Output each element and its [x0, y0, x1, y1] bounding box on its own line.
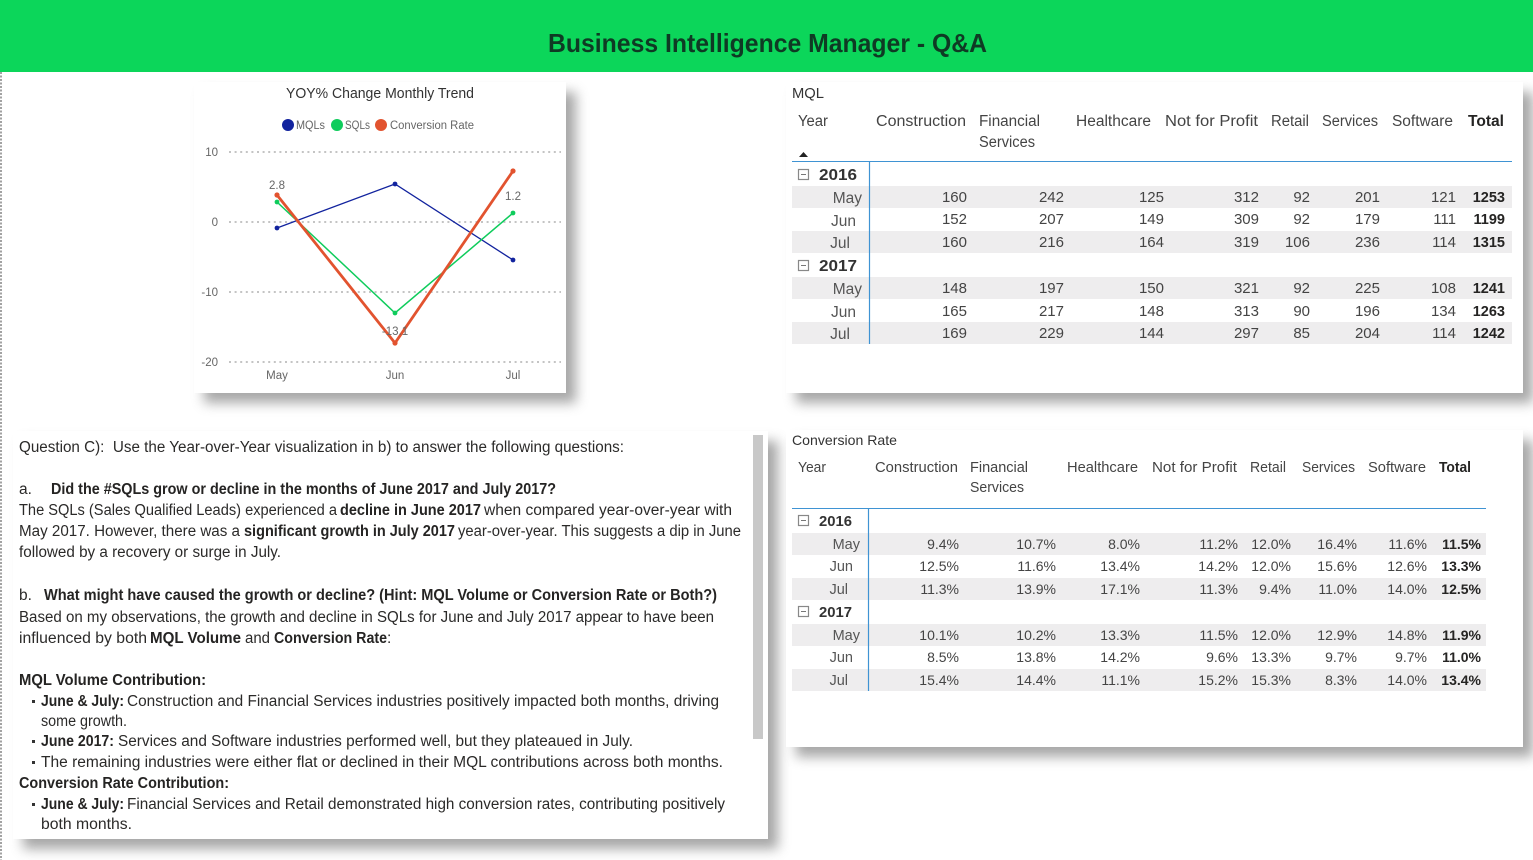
table values: 15.6%	[1317, 558, 1357, 574]
year groups	[798, 167, 857, 275]
part a: significant growth in July 2017	[244, 523, 455, 540]
table values: 15.2%	[1198, 672, 1238, 688]
table values: 12.0%	[1251, 627, 1291, 643]
month labels: May	[833, 190, 862, 207]
table values: 8.0%	[1108, 536, 1140, 552]
table values: 14.2%	[1198, 558, 1238, 574]
table header: Services	[970, 480, 1024, 496]
table values	[942, 189, 1505, 342]
table header: Healthcare	[1067, 460, 1138, 476]
table values: 229	[1039, 325, 1064, 342]
table values: 196	[1355, 303, 1380, 320]
table values: 13.4%	[1100, 558, 1140, 574]
table values: 13.3%	[1441, 558, 1482, 574]
table values: 125	[1139, 189, 1164, 206]
table values: 85	[1293, 325, 1310, 342]
table values: 8.5%	[927, 649, 959, 665]
MQL volume contribution: MQL Volume Contribution:	[19, 672, 206, 689]
table values: 16.4%	[1317, 536, 1357, 552]
line: MQLs	[275, 182, 515, 262]
table values: 1315	[1473, 235, 1505, 251]
table values: 164	[1139, 234, 1164, 251]
panel: YOY chart	[194, 82, 576, 403]
month labels: Jul	[829, 673, 848, 689]
part a: when compared year-over-year with	[483, 502, 732, 519]
table values: 152	[942, 211, 967, 228]
MQL volume contribution: some growth.	[41, 713, 127, 730]
table values: 201	[1355, 189, 1380, 206]
table values: 309	[1234, 211, 1259, 228]
table values: 13.4%	[1441, 672, 1482, 688]
table values: 15.4%	[919, 672, 959, 688]
table values: 197	[1039, 280, 1064, 297]
x axis labels: Jun	[386, 370, 404, 382]
table values: 9.4%	[927, 536, 959, 552]
table values: 8.3%	[1325, 672, 1357, 688]
table values: 313	[1234, 303, 1259, 320]
table values: 1253	[1473, 190, 1505, 206]
part b: b.	[19, 587, 32, 604]
part a: decline in June 2017	[340, 502, 481, 519]
table header	[798, 113, 1504, 157]
table header: Total	[1439, 460, 1471, 476]
part a: May 2017. However, there was a	[19, 523, 240, 540]
part a: followed by a recovery or surge in July.	[19, 544, 281, 561]
table values: 165	[942, 303, 967, 320]
table values: 179	[1355, 211, 1380, 228]
table header: Software	[1392, 113, 1453, 130]
table header: Software	[1368, 460, 1426, 476]
MQL volume contribution	[19, 672, 723, 771]
x axis labels: May	[266, 370, 288, 382]
table values: 114	[1432, 325, 1456, 342]
table header: Not for Profit	[1165, 113, 1259, 130]
x axis labels: Jul	[506, 370, 520, 382]
part a: a.	[19, 481, 32, 498]
part b: MQL Volume	[150, 630, 241, 647]
table values: 160	[942, 234, 967, 251]
table values: 14.8%	[1387, 627, 1427, 643]
table values: 13.9%	[1016, 581, 1056, 597]
conversion rate contribution: June & July:	[41, 796, 124, 813]
panel: question text	[13, 431, 778, 849]
table values: 13.8%	[1016, 649, 1056, 665]
table values: 14.0%	[1387, 581, 1427, 597]
table values: 9.4%	[1259, 581, 1291, 597]
month labels: Jun	[830, 559, 853, 575]
table values: 216	[1039, 234, 1064, 251]
table values: 12.0%	[1251, 536, 1291, 552]
table values: 11.6%	[1017, 558, 1056, 574]
year groups: 2016	[819, 167, 857, 184]
data labels: 1.2	[505, 191, 521, 203]
part b: influenced by both	[19, 630, 147, 647]
table values: 10.2%	[1016, 627, 1056, 643]
table values: 121	[1431, 189, 1456, 206]
MQL volume contribution: June & July:	[41, 693, 124, 710]
table values: 148	[942, 280, 967, 297]
line: conversion rate	[274, 168, 516, 346]
table values: 11.1%	[1101, 672, 1140, 688]
conversion rate contribution: both months.	[41, 816, 132, 833]
table values: 217	[1039, 303, 1064, 320]
title: Business Intelligence Manager - Q&A	[548, 28, 987, 58]
table values: 11.5%	[1199, 627, 1238, 643]
table header: Services	[1302, 460, 1355, 476]
table values: 13.3%	[1251, 649, 1291, 665]
chart legend: MQLs	[296, 120, 325, 132]
month labels	[829, 537, 861, 689]
MQL volume contribution: The remaining industries were either flat or declined in their MQL contributions across both months.	[41, 754, 723, 771]
table values	[919, 536, 1482, 688]
table values: 10.7%	[1016, 536, 1056, 552]
table values: 150	[1139, 280, 1164, 297]
y axis labels: -20	[201, 357, 218, 369]
question heading: Question C): Use the Year-over-Year visualization in b) to answer the following questions:	[19, 439, 624, 456]
table header: Construction	[876, 113, 966, 130]
table values: 108	[1431, 280, 1456, 297]
conversion rate contribution: Conversion Rate Contribution:	[19, 775, 229, 792]
table header: Financial	[970, 460, 1028, 476]
table header: Total	[1468, 113, 1504, 130]
table values: 11.5%	[1442, 536, 1482, 552]
month labels: Jun	[831, 213, 856, 230]
conversion rate contribution	[19, 775, 725, 833]
MQL volume contribution: Construction and Financial Services industries positively impacted both months, driving	[127, 693, 719, 710]
table values: 160	[942, 189, 967, 206]
table title: MQL	[792, 86, 824, 102]
table values: 1263	[1473, 304, 1505, 320]
year groups	[798, 514, 852, 621]
table values: 12.9%	[1317, 627, 1357, 643]
table values: 9.7%	[1395, 649, 1427, 665]
table header: Retail	[1250, 460, 1286, 476]
table values: 134	[1431, 303, 1456, 320]
conversion rate contribution: Financial Services and Retail demonstrated high conversion rates, contributing positively	[127, 796, 725, 813]
part a: The SQLs (Sales Qualified Leads) experienced a	[19, 502, 337, 519]
month labels: May	[833, 628, 861, 644]
line: SQLs	[275, 200, 515, 315]
table header: Financial	[979, 113, 1040, 130]
scrollbar	[753, 435, 763, 739]
y axis labels: 0	[212, 217, 218, 229]
data labels	[269, 180, 521, 338]
part b: :	[387, 630, 391, 647]
x axis labels	[266, 370, 520, 382]
table values: 11.6%	[1388, 536, 1427, 552]
header banner	[0, 0, 1533, 72]
chart title: YOY% Change Monthly Trend	[286, 86, 474, 102]
table values: 9.7%	[1325, 649, 1357, 665]
table values: 10.1%	[919, 627, 959, 643]
month labels: Jul	[830, 235, 850, 252]
y axis labels: 10	[205, 147, 218, 159]
data labels: -13.1	[382, 326, 408, 338]
table values: 14.2%	[1100, 649, 1140, 665]
table header: Construction	[875, 460, 958, 476]
table values: 11.0%	[1442, 649, 1482, 665]
table values: 312	[1234, 189, 1259, 206]
table values: 149	[1139, 211, 1164, 228]
part a: year-over-year. This suggests a dip in June	[458, 523, 741, 540]
month labels: Jun	[831, 304, 856, 321]
table values: 11.2%	[1199, 536, 1238, 552]
table values: 114	[1432, 234, 1456, 251]
table values: 12.5%	[919, 558, 959, 574]
part b	[19, 587, 717, 647]
table values: 12.5%	[1441, 581, 1482, 597]
table values: 90	[1293, 303, 1310, 320]
table header: Year	[798, 113, 828, 130]
table values: 1241	[1473, 281, 1505, 297]
part b: Based on my observations, the growth and decline in SQLs for June and July 2017 appear to have been	[19, 609, 714, 626]
table values: 169	[942, 325, 967, 342]
panel: conversion rate table	[786, 430, 1533, 757]
table values: 319	[1234, 234, 1259, 251]
part b: What might have caused the growth or decline? (Hint: MQL Volume or Conversion Rate or Both?)	[44, 587, 717, 604]
table values: 321	[1234, 280, 1259, 297]
chart legend: Conversion Rate	[390, 120, 474, 132]
MQL volume contribution: Services and Software industries performed well, but they plateaued in July.	[118, 733, 633, 750]
year groups: 2016	[819, 514, 852, 530]
table values: 236	[1355, 234, 1380, 251]
table values: 14.4%	[1016, 672, 1056, 688]
table values: 92	[1293, 280, 1310, 297]
month labels: May	[833, 281, 862, 298]
part b: Conversion Rate	[274, 630, 387, 647]
table header: Year	[798, 460, 826, 476]
table values: 14.0%	[1387, 672, 1427, 688]
table title: Conversion Rate	[792, 432, 897, 448]
table header: Services	[1322, 113, 1378, 130]
month labels: Jul	[830, 326, 850, 343]
table values: 92	[1293, 189, 1310, 206]
chart legend	[282, 119, 474, 132]
table values: 11.9%	[1442, 627, 1482, 643]
table values: 111	[1433, 211, 1456, 228]
table values: 1242	[1473, 326, 1505, 342]
month labels: May	[833, 537, 861, 553]
table values: 15.3%	[1251, 672, 1291, 688]
table values: 148	[1139, 303, 1164, 320]
year groups: 2017	[819, 258, 857, 275]
table header	[798, 460, 1471, 496]
table values: 242	[1039, 189, 1064, 206]
panel: MQL table	[786, 82, 1533, 403]
table values: 12.6%	[1387, 558, 1427, 574]
table values: 1199	[1474, 212, 1505, 228]
table values: 92	[1293, 211, 1310, 228]
table values: 17.1%	[1100, 581, 1140, 597]
month labels: Jun	[830, 650, 853, 666]
y axis labels: -10	[201, 287, 218, 299]
data labels: 2.8	[269, 180, 285, 192]
y axis labels	[201, 147, 218, 369]
table values: 207	[1039, 211, 1064, 228]
table header: Services	[979, 134, 1035, 151]
table header: Healthcare	[1076, 113, 1151, 130]
part a: Did the #SQLs grow or decline in the months of June 2017 and July 2017?	[51, 481, 556, 498]
table values: 12.0%	[1251, 558, 1291, 574]
table values: 225	[1355, 280, 1380, 297]
month labels	[830, 190, 862, 343]
table values: 11.3%	[1199, 581, 1238, 597]
part a	[19, 481, 741, 561]
year groups: 2017	[819, 605, 852, 621]
part b: and	[245, 630, 270, 647]
table header: Not for Profit	[1152, 460, 1237, 476]
table values: 297	[1234, 325, 1259, 342]
table values: 144	[1139, 325, 1164, 342]
table values: 11.3%	[920, 581, 959, 597]
table values: 13.3%	[1100, 627, 1140, 643]
table values: 106	[1285, 234, 1310, 251]
month labels: Jul	[829, 582, 848, 598]
table header: Retail	[1271, 113, 1309, 130]
table values: 204	[1355, 325, 1380, 342]
table values: 9.6%	[1206, 649, 1238, 665]
chart legend: SQLs	[345, 120, 370, 132]
MQL volume contribution: June 2017:	[41, 733, 114, 750]
table values: 11.0%	[1318, 581, 1357, 597]
